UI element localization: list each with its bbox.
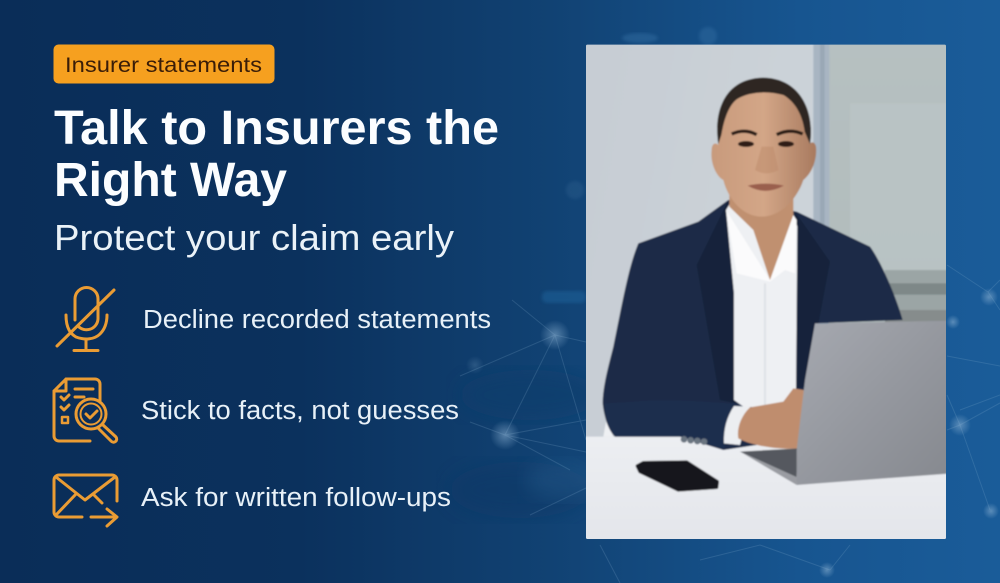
- title: Right Way: [54, 154, 287, 207]
- item: decline recorded statements: [57, 288, 491, 350]
- item: stick to facts: Stick to facts, not guesses: [141, 397, 459, 425]
- eyes and brows: [732, 131, 803, 191]
- icon: muted microphone: [57, 288, 114, 350]
- jacket: [603, 200, 903, 450]
- neck: [729, 187, 793, 280]
- phone: [637, 462, 717, 490]
- item: written follow-ups: Ask for written follow-ups: [141, 484, 451, 512]
- item: written follow-ups: [54, 475, 451, 526]
- icon: document with magnifier: [54, 379, 117, 442]
- item: stick to facts: [54, 379, 459, 442]
- subtitle: Protect your claim early: [54, 217, 454, 258]
- desk: [580, 437, 952, 545]
- icon: envelope with arrow: [54, 475, 117, 526]
- shirt: [726, 203, 797, 408]
- title: Talk to Insurers the: [54, 102, 499, 155]
- laptop: [740, 321, 952, 485]
- jacket buttons: [681, 436, 707, 445]
- badge: Insurer statements: Insurer statements: [65, 53, 262, 77]
- office wall: [580, 40, 952, 447]
- hair: [717, 78, 811, 144]
- head: [711, 82, 816, 217]
- item: decline recorded statements: Decline recorded statements: [143, 306, 491, 334]
- photo: man at desk with laptop: [580, 40, 952, 545]
- badge: Insurer statements: [54, 44, 274, 84]
- cuff and hands: [724, 388, 804, 449]
